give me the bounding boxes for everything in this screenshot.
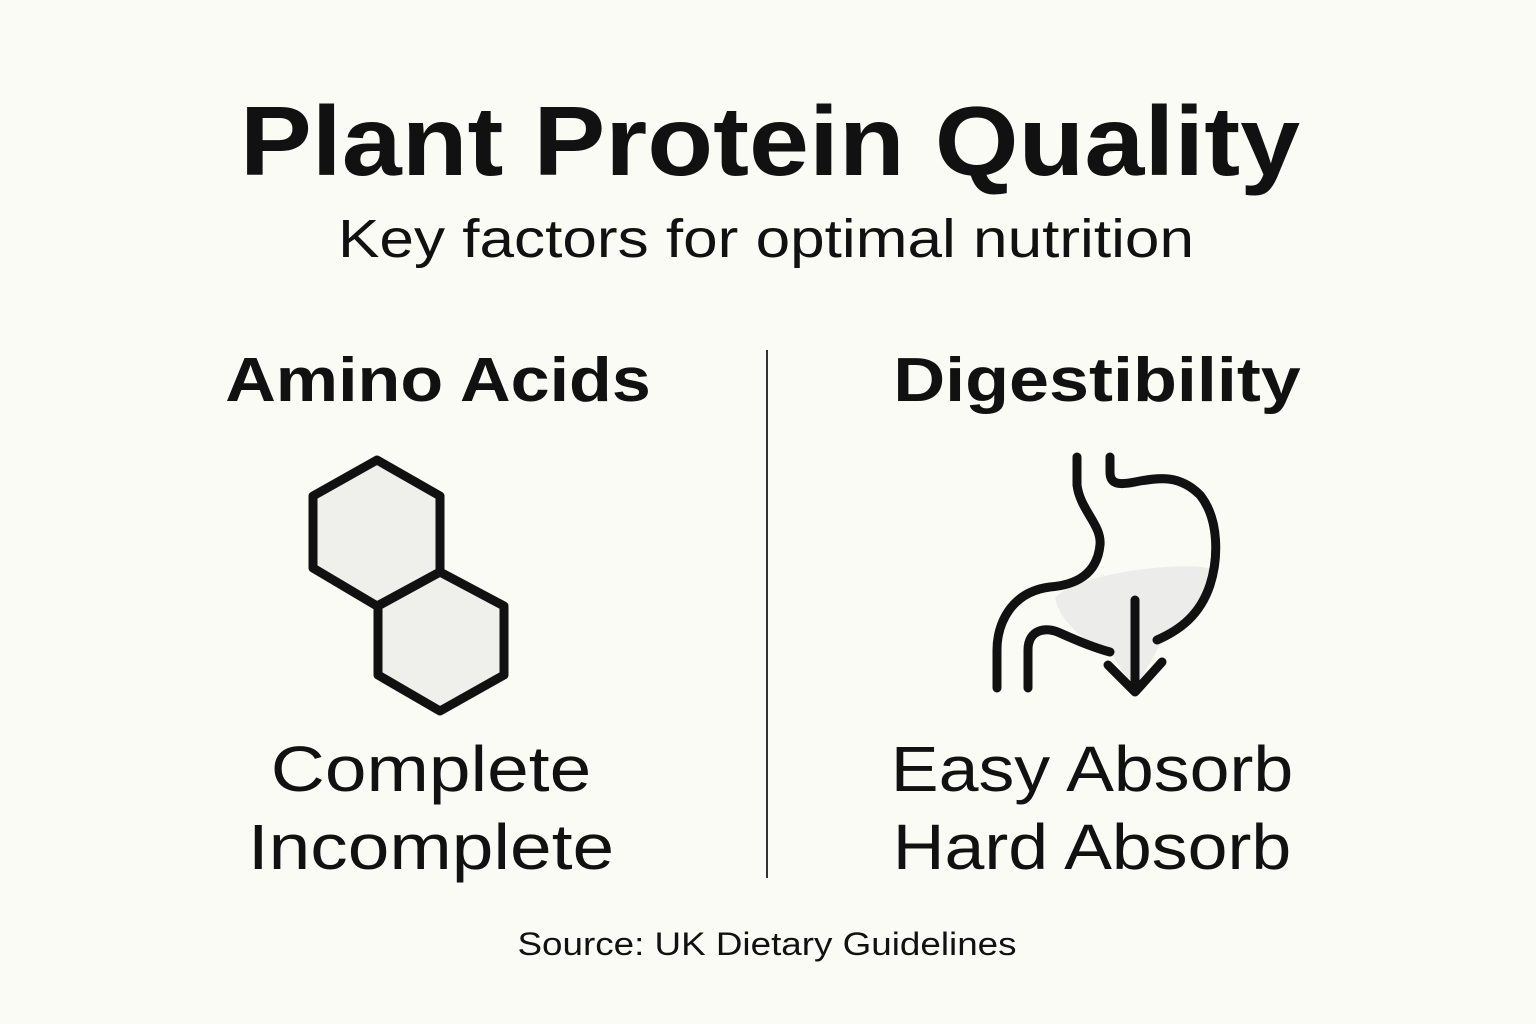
text: amino acid types: Incomplete xyxy=(248,811,614,883)
text: absorption types xyxy=(891,733,1293,883)
title: Plant Protein Quality xyxy=(240,86,1300,196)
heading: amino acids: Amino Acids xyxy=(225,346,651,415)
divider xyxy=(766,350,768,878)
heading: digestibility: Digestibility xyxy=(893,346,1301,415)
text: amino acid types: Complete xyxy=(271,733,591,805)
text: absorption types: Easy Absorb xyxy=(891,733,1293,805)
subtitle: Key factors for optimal nutrition xyxy=(338,209,1194,269)
source: Source: UK Dietary Guidelines xyxy=(517,926,1017,962)
text: absorption types: Hard Absorb xyxy=(893,811,1291,883)
text: amino acid types xyxy=(248,733,614,883)
